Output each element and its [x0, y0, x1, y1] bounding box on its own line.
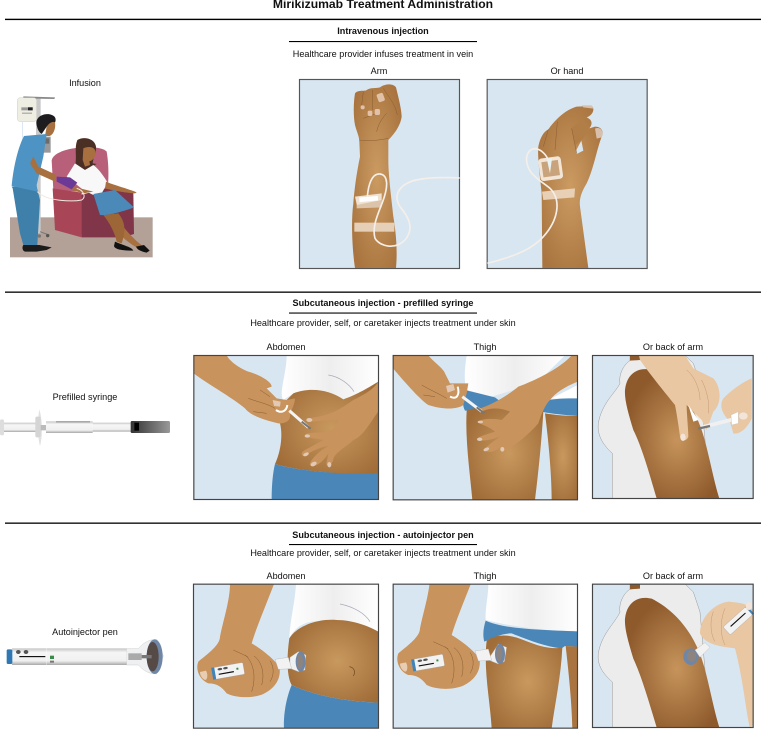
patient — [67, 138, 150, 253]
panel: arm: Arm — [371, 66, 387, 76]
icon: prefilled syringe — [0, 409, 170, 446]
panel: thigh, pen: Thigh — [474, 571, 496, 581]
panel: back of arm, pen — [592, 571, 754, 728]
label: prefilled syringe: Prefilled syringe — [53, 392, 117, 402]
panel: hand: Or hand — [551, 66, 583, 76]
label: autoinjector pen: Autoinjector pen — [52, 627, 118, 637]
panel: back of arm, syringe — [592, 342, 753, 498]
section: autoinjector pen — [7, 530, 754, 728]
panel: back of arm, pen: Or back of arm — [643, 571, 703, 581]
panel: thigh, syringe — [393, 342, 578, 500]
section: intravenous injection — [10, 26, 647, 268]
section: prefilled syringe — [0, 298, 753, 500]
panel: abdomen, syringe: Abdomen — [267, 342, 305, 352]
illustration: infusion scene — [10, 96, 153, 257]
heading: prefilled syringe section: Subcutaneous injection - prefilled syringe — [293, 298, 473, 308]
text: intravenous description: Healthcare provider infuses treatment in vein — [293, 49, 473, 59]
label: infusion: Infusion — [69, 78, 101, 88]
panel: thigh, pen — [393, 571, 578, 728]
panel: abdomen, syringe — [194, 342, 378, 499]
panel: back of arm, syringe: Or back of arm — [643, 342, 703, 352]
chair — [52, 147, 134, 237]
panel: abdomen, pen — [193, 571, 378, 728]
text: autoinjector description: Healthcare provider, self, or caretaker injects treatment under skin — [250, 548, 516, 558]
panel: arm — [299, 66, 460, 268]
panel: thigh, syringe: Thigh — [474, 342, 496, 352]
provider — [12, 114, 77, 252]
panel: abdomen, pen: Abdomen — [267, 571, 305, 581]
icon: autoinjector pen — [7, 639, 163, 674]
heading: autoinjector section: Subcutaneous injection - autoinjector pen — [292, 530, 474, 540]
panel: hand — [487, 66, 647, 268]
text: prefilled syringe description: Healthcare provider, self, or caretaker injects treatment under skin — [250, 318, 516, 328]
heading: intravenous injection: Intravenous injection — [337, 26, 429, 36]
